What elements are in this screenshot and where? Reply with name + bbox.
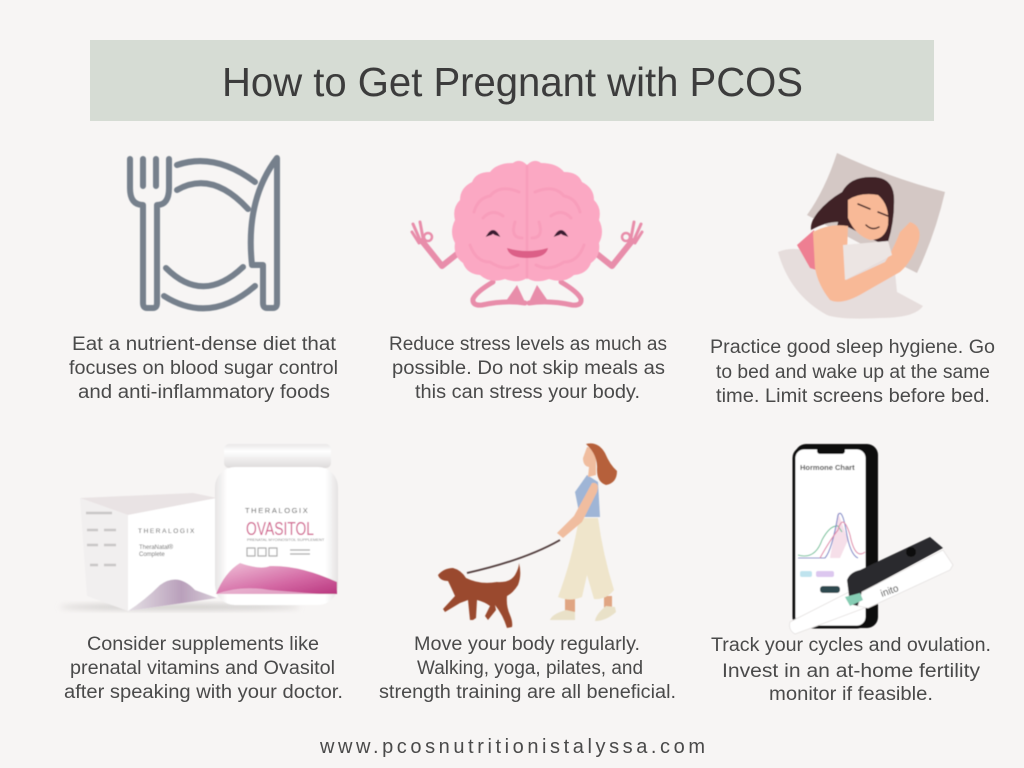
box <box>80 493 217 611</box>
pants <box>558 518 614 600</box>
text: tracking tip: monitor if feasible. <box>769 684 933 705</box>
text: tracking tip: Invest in an at-home fertility <box>722 661 981 682</box>
face <box>848 194 888 240</box>
shirt <box>575 475 600 517</box>
phone <box>794 444 878 628</box>
text: supplements tip <box>64 634 343 703</box>
text: tracking tip: Track your cycles and ovulation. <box>711 635 991 656</box>
text: movement tip: strength training are all beneficial. <box>379 682 676 703</box>
leash <box>467 540 560 573</box>
arm and shoulder <box>813 222 920 302</box>
text: sleep tip: Practice good sleep hygiene. Go <box>710 337 995 358</box>
held pillow <box>843 241 892 280</box>
brain folds <box>470 166 584 278</box>
dog <box>438 563 520 628</box>
text: movement tip: Move your body regularly. <box>414 634 640 655</box>
brain body <box>452 161 602 281</box>
text: diet tip: Eat a nutrient-dense diet that <box>72 334 337 355</box>
arms <box>412 222 642 266</box>
inito monitor <box>790 537 953 634</box>
hair <box>586 443 617 485</box>
text: tracking tip <box>711 635 991 705</box>
text: sleep tip: to bed and wake up at the same <box>716 362 990 383</box>
icon: fork, plate and knife <box>130 158 277 308</box>
box: Complete <box>139 552 165 558</box>
text: supplements tip: after speaking with your doctor. <box>64 682 343 703</box>
pillow <box>807 153 945 273</box>
text: supplements tip: Consider supplements like <box>87 634 319 655</box>
jar <box>215 444 338 605</box>
text: stress tip <box>389 334 667 403</box>
text: movement tip <box>379 634 676 703</box>
footer website: www.pcosnutritionistalyssa.com <box>319 736 705 758</box>
text: diet tip: and anti-inflammatory foods <box>78 382 330 403</box>
text: stress tip: possible. Do not skip meals as <box>392 358 665 379</box>
icon: meditating brain <box>412 161 642 305</box>
title banner <box>90 40 934 121</box>
text: stress tip: Reduce stress levels as much as <box>389 334 667 355</box>
hair back <box>811 177 894 243</box>
monitor brand: inito <box>879 583 901 600</box>
text: supplements tip: prenatal vitamins and Ovasitol <box>70 658 335 679</box>
pink top <box>797 230 822 272</box>
illustration: supplements <box>60 444 338 611</box>
text: sleep tip <box>710 337 995 407</box>
jar label: THERALOGIX <box>245 506 309 515</box>
blanket <box>778 245 923 319</box>
head <box>583 447 596 477</box>
illustration: sleeping woman <box>778 153 945 319</box>
box label: THERALOGIX <box>138 528 196 535</box>
illustration: woman walking a dog <box>438 443 617 628</box>
shadow <box>60 604 300 610</box>
text: stress tip: this can stress your body. <box>415 382 640 403</box>
text: diet tip <box>69 334 338 403</box>
feet <box>550 610 575 620</box>
jar: PRENATAL MYOINOSITOL SUPPLEMENT <box>247 537 325 542</box>
face <box>488 231 498 235</box>
text: sleep tip: time. Limit screens before bed. <box>716 386 990 407</box>
chart <box>798 512 865 558</box>
legs <box>473 282 581 305</box>
illustration: hormone tracking app and monitor <box>790 444 953 634</box>
title: How to Get Pregnant with PCOS <box>222 59 803 105</box>
arm <box>557 483 598 538</box>
text: diet tip: focuses on blood sugar control <box>69 358 338 379</box>
jar: OVASITOL <box>246 519 314 539</box>
text: movement tip: Walking, yoga, pilates, and <box>417 658 643 679</box>
box: TheraNatal® <box>139 544 174 551</box>
ankles <box>565 596 612 613</box>
app heading: Hormone Chart <box>800 463 855 472</box>
